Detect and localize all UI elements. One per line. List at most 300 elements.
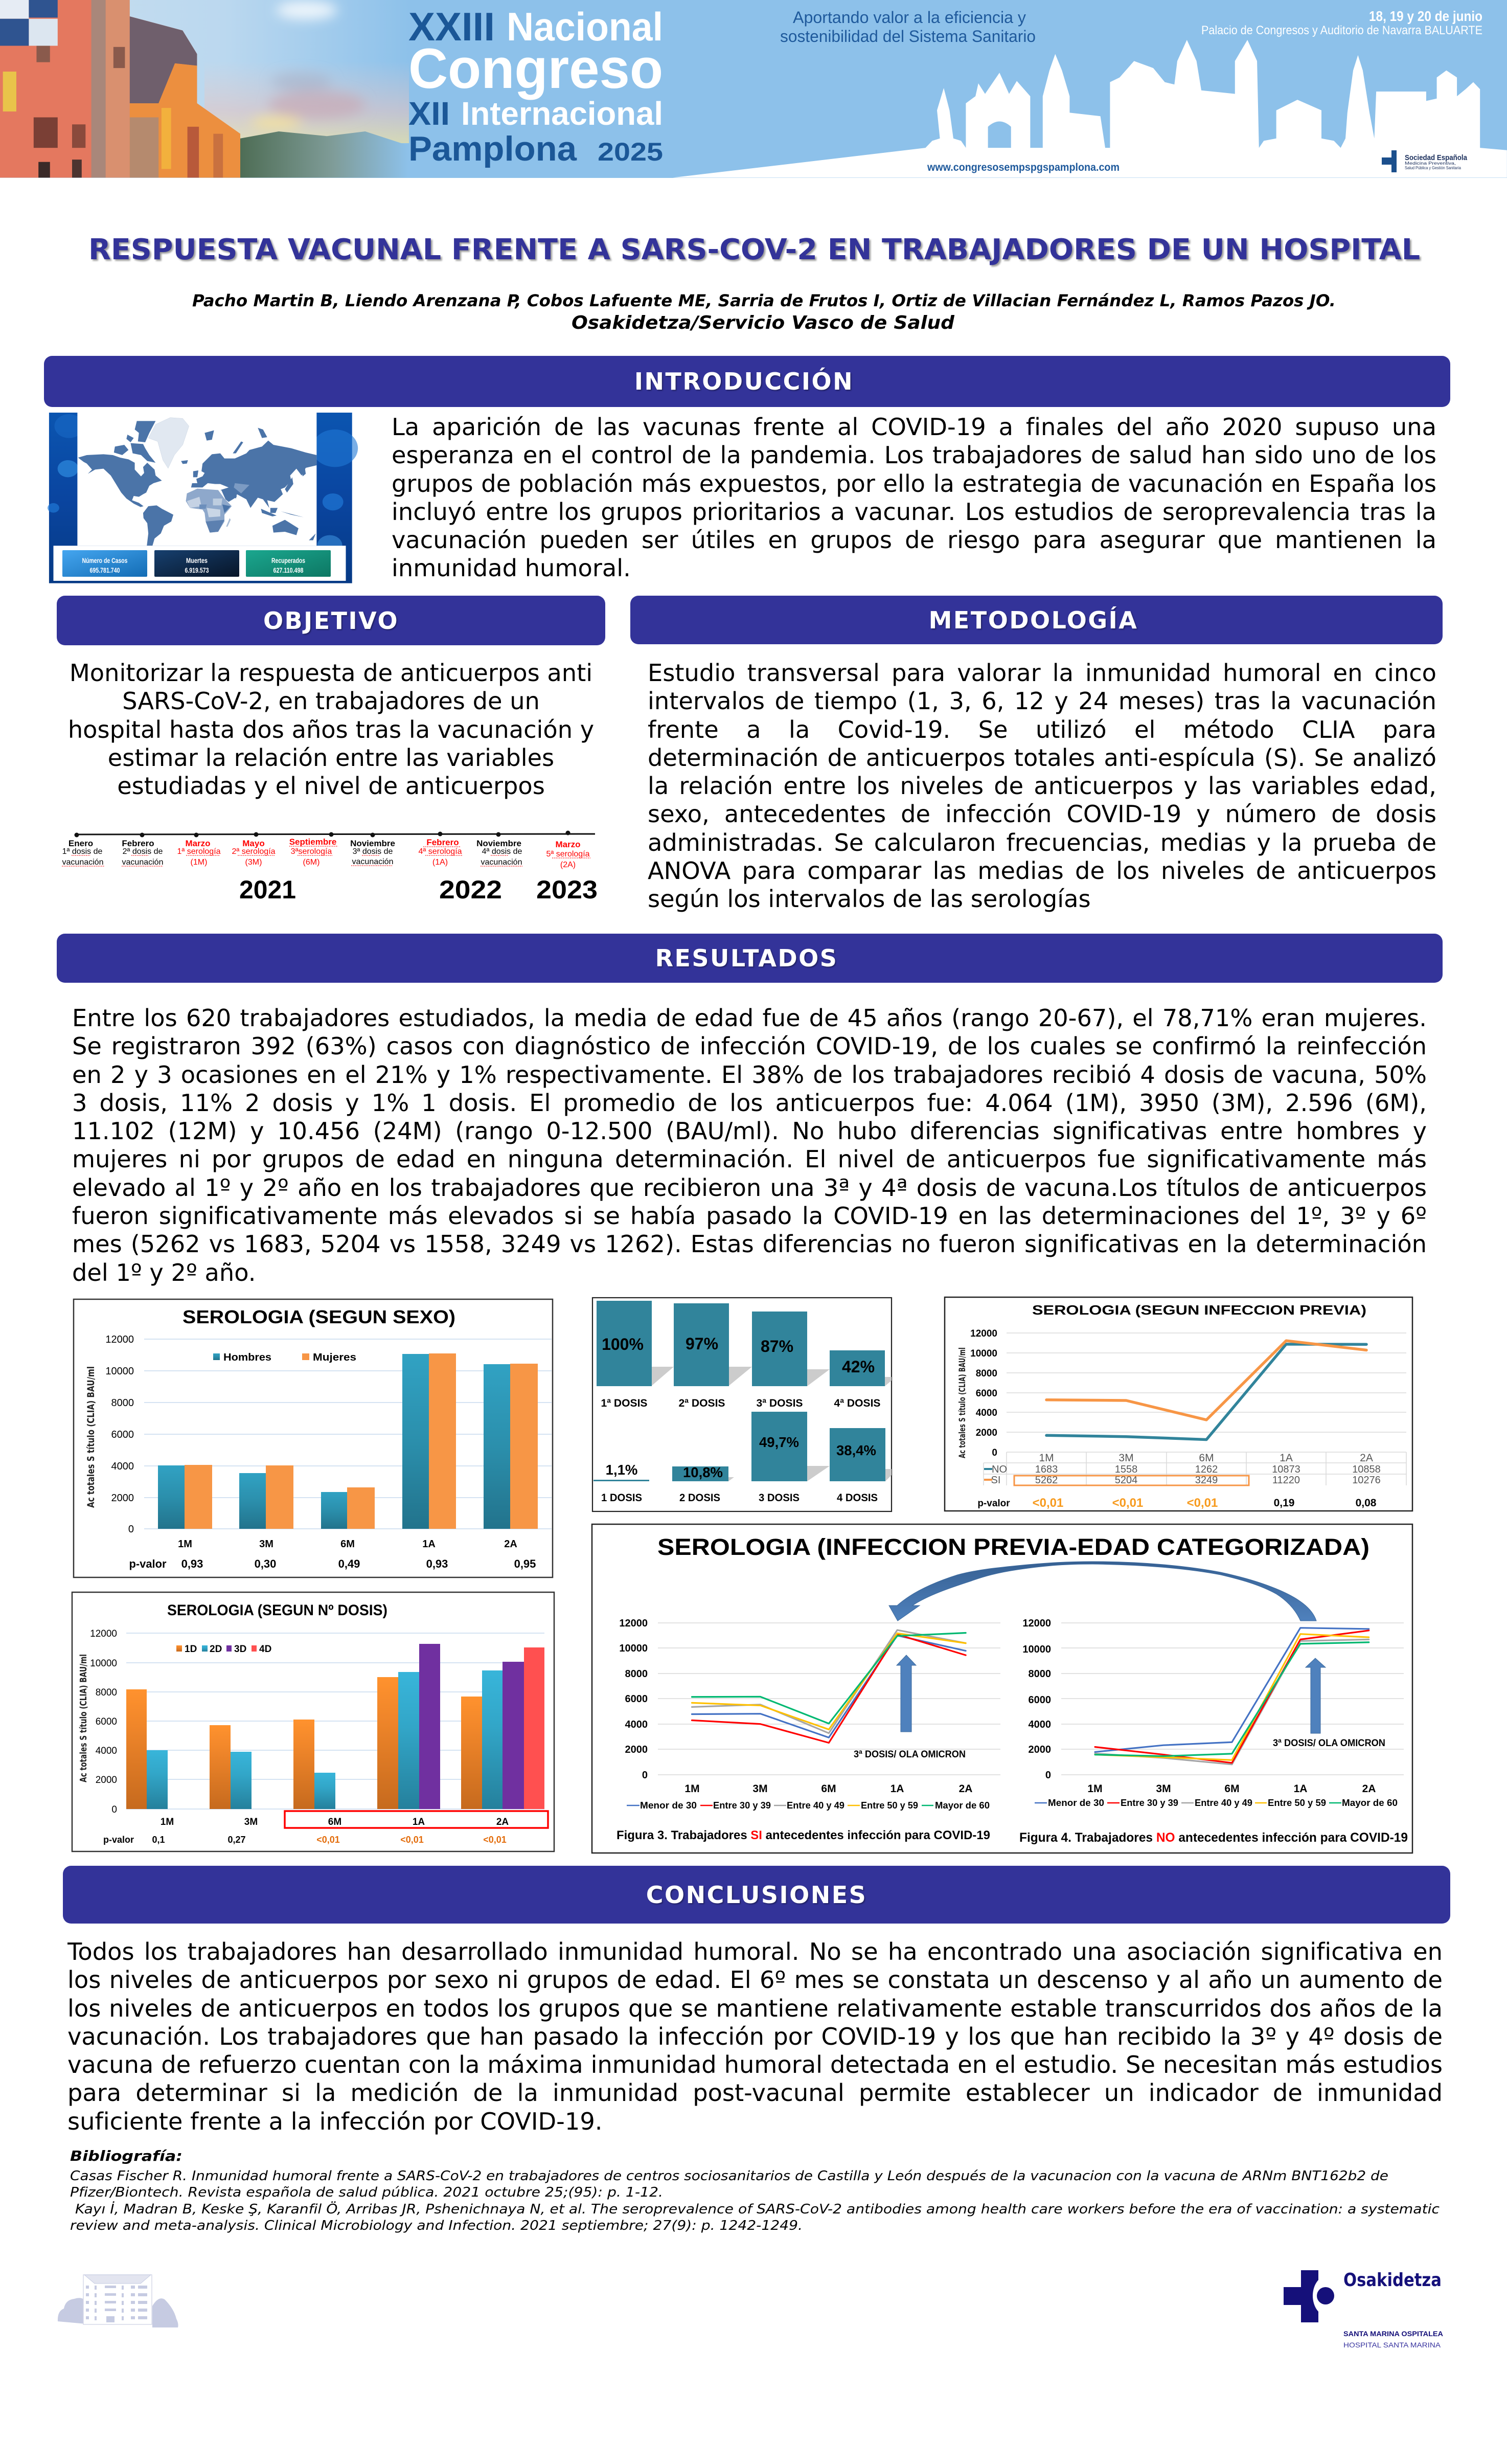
stat: Muertes: 6.919.573 xyxy=(185,566,209,574)
logo: Osakidetza: Osakidetza xyxy=(1343,2270,1442,2291)
p values: <0,01 xyxy=(1033,1496,1063,1510)
data table: 5204 xyxy=(1115,1475,1137,1486)
text: resultados: Entre los 620 trabajadores estudiados, la media de edad fue de 45 años (rango 20-67), el 78,71% eran mujeres. xyxy=(72,1004,1427,1032)
vaccination and serology timeline: 1ª serología xyxy=(177,847,221,856)
text: resultados: mujeres ni por grupos de edad en ninguna determinación. El nivel de anticuerpos fue significativamente más xyxy=(72,1145,1427,1173)
y axis: 10000 xyxy=(90,1658,117,1669)
y axis: 12000 xyxy=(105,1334,134,1345)
p values: <0,01 xyxy=(483,1835,507,1845)
percentages by total doses: 10,8% xyxy=(683,1464,723,1480)
legend: Hombres xyxy=(223,1352,271,1363)
stat: Recuperados: Recuperados xyxy=(271,556,305,564)
data table: 1558 xyxy=(1115,1464,1137,1475)
vaccination and serology timeline: (2A) xyxy=(560,861,576,869)
world map panel with case statistics xyxy=(48,413,358,583)
logo: Sociedad Española: Medicina Preventiva, xyxy=(1405,161,1456,166)
text: conclusiones: vacunación. Los trabajadores que han pasado la infección por COVID-19 y los que han recibido la 3º y 4º dosis de xyxy=(67,2023,1443,2050)
p values: 0,30 xyxy=(255,1557,276,1570)
labels by dose received: 3ª DOSIS xyxy=(757,1397,803,1409)
y axis: 12000 xyxy=(90,1629,117,1639)
vaccination and serology timeline: Marzo xyxy=(185,839,211,848)
y axis: 8000 xyxy=(111,1397,134,1409)
data table: 10873 xyxy=(1272,1464,1300,1475)
x axis labels xyxy=(161,1817,509,1827)
p values: 0,1 xyxy=(152,1835,165,1845)
vaccination and serology timeline: vacunación xyxy=(481,858,522,867)
congress motto: sostenibilidad del Sistema Sanitario xyxy=(780,27,1036,46)
p values: 0,27 xyxy=(227,1835,246,1845)
orange highlight box xyxy=(1014,1476,1249,1485)
timeline years: 2023 xyxy=(536,875,598,904)
labels by total doses: 4 DOSIS xyxy=(837,1492,878,1504)
vaccination and serology timeline: Mayo xyxy=(242,839,265,848)
y axis xyxy=(105,1334,134,1535)
congress name xyxy=(408,4,663,168)
text: introducción: La aparición de las vacunas frente al COVID-19 a finales del año 2020 supuso una xyxy=(392,413,1436,441)
bibliography: Bibliografía: xyxy=(70,2147,182,2164)
chart: figura 4 x axis: 1A xyxy=(1294,1783,1307,1795)
y axis: 2000 xyxy=(976,1428,997,1438)
chart: serología según número de dosis xyxy=(72,1592,554,1851)
text: metodología: frente a la Covid-19. Se utilizó el método CLIA para xyxy=(648,716,1436,743)
text: metodología xyxy=(648,659,1436,913)
chart: serología según infección previa xyxy=(945,1297,1412,1511)
data table: 2A xyxy=(1360,1452,1373,1464)
y axis: 10000 xyxy=(105,1366,134,1377)
y axis: 10000 xyxy=(970,1348,997,1359)
data table: 6M xyxy=(1199,1452,1214,1464)
chart: figura 4 y axis: 2000 xyxy=(1029,1744,1051,1755)
chart: figura 3 y axis: 10000 xyxy=(619,1643,648,1654)
text: objetivo xyxy=(68,659,594,800)
stat: Recuperados: 627.110.498 xyxy=(273,566,304,574)
vaccination and serology timeline: Marzo xyxy=(555,840,581,849)
p values xyxy=(977,1496,1377,1510)
caption figura 4: Figura 4. Trabajadores NO antecedentes infección para COVID-19 xyxy=(1019,1830,1408,1845)
chart: figura 3 y axis xyxy=(619,1618,648,1781)
bars by total doses xyxy=(593,1412,885,1481)
chart: figura 3 y axis: 4000 xyxy=(625,1719,648,1730)
line: con infección previa xyxy=(1046,1341,1366,1420)
percentages by total doses: 49,7% xyxy=(759,1434,799,1450)
labels by dose received: 2ª DOSIS xyxy=(679,1397,725,1409)
x axis labels: 1M xyxy=(178,1539,192,1550)
x axis labels: 1A xyxy=(413,1817,425,1827)
p values: <0,01 xyxy=(400,1835,424,1845)
chart: figura 3 y axis: 8000 xyxy=(625,1668,648,1680)
annotation figure 4: 3ª DOSIS/ OLA OMICRON xyxy=(1273,1738,1385,1749)
x axis labels: 2A xyxy=(504,1539,517,1550)
chart: figura 4 legend: Mayor de 60 xyxy=(1342,1798,1398,1808)
bibliography: Casas Fischer R. Inmunidad humoral frente a SARS-CoV-2 en trabajadores de centros sociosanitarios de Castilla y León después de la vacunacion con la vacuna de ARNm BNT162b2 de xyxy=(70,2168,1388,2184)
arrow: curved arrow linking both charts xyxy=(889,1562,1316,1621)
text: metodología: determinación de anticuerpos totales anti-espícula (S). Se analizó xyxy=(648,744,1436,772)
text: metodología: según los intervalos de las serologías xyxy=(648,885,1091,913)
bars 4D xyxy=(524,1647,544,1809)
text: objetivo: estimar la relación entre las variables xyxy=(108,744,554,772)
y axis title: Ac totales S título (CLIA) BAU/ml xyxy=(78,1654,89,1782)
title: RESPUESTA VACUNAL FRENTE A SARS-COV-2 EN TRABAJADORES DE UN HOSPITAL xyxy=(88,233,1420,266)
text: introducción: inmunidad humoral. xyxy=(392,554,631,582)
heading: resultados: RESULTADOS xyxy=(655,944,838,972)
chart: figura 4 legend: Entre 50 y 59 xyxy=(1268,1798,1326,1808)
chart: figura 3 x axis: 1M xyxy=(684,1783,700,1795)
x axis labels: 6M xyxy=(328,1817,341,1827)
chart panel: serología por infección previa y edad categorizada xyxy=(592,1524,1412,1853)
congress motto xyxy=(780,8,1036,46)
bibliography xyxy=(70,2147,1440,2233)
y axis: 2000 xyxy=(96,1775,117,1785)
y axis: 4000 xyxy=(96,1746,117,1756)
vaccination and serology timeline: Febrero xyxy=(426,838,459,847)
y axis title: Ac totales S título (CLIA) BAU/ml xyxy=(85,1366,97,1508)
text: resultados: elevado al 1º y 2º año en los trabajadores que recibieron una 3ª y 4ª dosis de vacuna.Los títulos de anticuerpos xyxy=(72,1174,1427,1202)
text: metodología: sexo, antecedentes de infección COVID-19 y número de dosis xyxy=(648,800,1436,828)
chart title: SEROLOGIA (SEGUN INFECCION PREVIA) xyxy=(1032,1302,1366,1318)
p values: 0,93 xyxy=(426,1557,448,1570)
bibliography: review and meta-analysis. Clinical Microbiology and Infection. 2021 septiembre; 27(9): p. 1242-1249. xyxy=(70,2218,803,2233)
vaccination and serology timeline: (3M) xyxy=(245,858,262,867)
chart: figura 4 x axis: 3M xyxy=(1156,1783,1171,1795)
text: metodología: administradas. Se calcularon frecuencias, medias y la prueba de xyxy=(648,829,1436,856)
p values: 0,93 xyxy=(181,1557,203,1570)
y axis: 4000 xyxy=(976,1408,997,1418)
skyline of Pamplona and white wedge xyxy=(673,40,1507,177)
text: objetivo: estudiadas y el nivel de anticuerpos xyxy=(117,772,545,800)
vaccination and serology timeline: 1ª dosis de xyxy=(62,847,103,856)
labels by dose received xyxy=(601,1397,880,1409)
chart: figura 3 y axis: 12000 xyxy=(619,1618,648,1629)
chart: figura 4 y axis xyxy=(1022,1618,1051,1781)
heading: conclusiones: CONCLUSIONES xyxy=(646,1881,867,1908)
chart: figura 3 x axis: 6M xyxy=(821,1783,836,1795)
vaccination and serology timeline: (6M) xyxy=(303,858,319,867)
text: resultados: Se registraron 392 (63%) casos con diagnóstico de infección COVID-19, de los cuales se confirmó la reinfección xyxy=(72,1032,1427,1060)
p values: 0,19 xyxy=(1274,1497,1294,1509)
congress name: XXIII xyxy=(408,4,495,49)
timeline years xyxy=(239,875,598,904)
x axis labels: 2A xyxy=(496,1817,509,1827)
chart: figura 3 legend: Mayor de 60 xyxy=(935,1800,990,1811)
text: conclusiones: Todos los trabajadores han desarrollado inmunidad humoral. No se ha encontrado una asociación significativa en xyxy=(67,1938,1443,1965)
vaccination and serology timeline: Enero xyxy=(68,839,93,848)
y axis: 8000 xyxy=(96,1687,117,1698)
x axis labels: 1A xyxy=(422,1539,436,1550)
chart: figura 3 legend xyxy=(627,1800,990,1811)
vaccination and serology timeline: vacunación xyxy=(62,858,103,867)
chart: figura 3 y axis: 0 xyxy=(642,1770,648,1781)
vaccination and serology timeline: 4ª serología xyxy=(418,847,462,856)
congress name: Congreso xyxy=(408,37,663,100)
data table: 1M xyxy=(1039,1452,1054,1464)
stat: Recuperados xyxy=(246,550,331,577)
data table: 10858 xyxy=(1352,1464,1381,1475)
chart: figura 4 legend: Entre 30 y 39 xyxy=(1121,1798,1178,1808)
logo: hospital building xyxy=(58,2275,178,2327)
heading: conclusiones xyxy=(63,1866,1450,1924)
percentages by dose received: 100% xyxy=(602,1335,644,1353)
logo: Osakidetza xyxy=(1284,2270,1443,2349)
y axis xyxy=(90,1629,117,1815)
text: resultados: en 2 y 3 ocasiones en el 21% y 1% respectivamente. El 38% de los trabajadores recibió 4 dosis de vacuna, 50% xyxy=(72,1061,1427,1089)
vaccination and serology timeline: 5ª serología xyxy=(546,850,590,858)
congress name: Nacional xyxy=(507,4,663,49)
text: conclusiones: para determinar si la medición de la inmunidad post-vacunal permite establecer un indicador de inmunidad xyxy=(67,2079,1443,2107)
caption figura 3: Figura 3. Trabajadores SI antecedentes infección para COVID-19 xyxy=(616,1828,990,1842)
congress name: Pamplona xyxy=(408,129,577,168)
data table xyxy=(984,1452,1381,1486)
chart: figura 3 legend: Entre 50 y 59 xyxy=(861,1800,918,1811)
legend: 1D xyxy=(185,1644,197,1655)
labels by total doses: 1 DOSIS xyxy=(601,1492,642,1504)
percentages by dose received xyxy=(602,1335,875,1376)
x axis labels: 3M xyxy=(259,1539,273,1550)
chart title: SEROLOGIA (SEGUN Nº DOSIS) xyxy=(167,1602,387,1619)
logo: Sociedad Española: Salud Pública y Gestión Sanitaria xyxy=(1405,166,1462,170)
annotation figure 3: 3ª DOSIS/ OLA OMICRON xyxy=(854,1749,966,1760)
congress date and venue: Palacio de Congresos y Auditorio de Navarra BALUARTE xyxy=(1201,24,1482,37)
text: metodología: la relación entre los niveles de anticuerpos y las variables edad, xyxy=(648,772,1436,800)
chart: figura 4 y axis: 8000 xyxy=(1029,1668,1051,1680)
legend xyxy=(176,1644,271,1655)
chart: figura 3 legend: Entre 40 y 49 xyxy=(787,1800,844,1811)
legend: 3D xyxy=(234,1644,246,1655)
chart: figura 4 legend: Menor de 30 xyxy=(1048,1798,1104,1808)
chart: figura 4 x axis: 6M xyxy=(1224,1783,1240,1795)
y axis: 0 xyxy=(111,1804,117,1815)
text: resultados: 11.102 (12M) y 10.456 (24M) (rango 0-12.500 (BAU/ml). No hubo diferencias significativas entre hombres y xyxy=(72,1117,1427,1145)
congress date and venue: 18, 19 y 20 de junio xyxy=(1369,8,1482,24)
bars 1D xyxy=(126,1677,482,1809)
vaccination and serology timeline: 3ª dosis de xyxy=(353,847,393,856)
text: resultados xyxy=(72,1004,1427,1286)
x axis labels xyxy=(178,1539,517,1550)
arrow: third dose figure 3 xyxy=(897,1655,916,1732)
vaccination and serology timeline: Septiembre xyxy=(289,837,336,847)
legend xyxy=(213,1352,356,1363)
percentages by dose received: 87% xyxy=(761,1337,793,1355)
p values: p-valor xyxy=(129,1557,167,1570)
p values: 0,95 xyxy=(514,1557,536,1570)
y axis xyxy=(970,1328,997,1458)
bars mujeres xyxy=(185,1353,538,1529)
vaccination and serology timeline: vacunación xyxy=(352,857,393,866)
heading: objetivo: OBJETIVO xyxy=(263,606,399,634)
vaccination and serology timeline: 4ª dosis de xyxy=(482,847,522,856)
p values xyxy=(129,1557,536,1570)
labels by dose received: 1ª DOSIS xyxy=(601,1397,647,1409)
panel: coverage of vaccine doses xyxy=(592,1298,892,1511)
legend: 2D xyxy=(210,1644,222,1655)
chart title: SEROLOGIA (SEGUN SEXO) xyxy=(182,1306,455,1327)
text: objetivo: Monitorizar la respuesta de anticuerpos anti xyxy=(70,659,592,687)
text: introducción: vacunación pueden ser útiles en grupos de riesgo para asegurar que mantienen la xyxy=(392,526,1436,554)
data table: 1A xyxy=(1280,1452,1293,1464)
chart: figura 4 x axis xyxy=(1087,1783,1376,1795)
chart: figura 3 legend: Entre 30 y 39 xyxy=(713,1800,771,1811)
data table: 11220 xyxy=(1272,1475,1300,1486)
vaccination and serology timeline: 2ª dosis de xyxy=(123,847,163,856)
y axis: 6000 xyxy=(976,1388,997,1399)
authors and institution xyxy=(192,291,1336,333)
text: resultados: 3 dosis, 11% 2 dosis y 1% 1 dosis. El promedio de los anticuerpos fue: 4.064 (1M), 3950 (3M), 2.596 (6M), xyxy=(72,1089,1427,1117)
data table: 3M xyxy=(1118,1452,1134,1464)
data table: 5262 xyxy=(1035,1475,1058,1486)
heading: introducción xyxy=(44,356,1450,407)
data table: NO xyxy=(992,1464,1007,1475)
logo: Sociedad Española: Sociedad Española xyxy=(1405,153,1468,162)
text: conclusiones: los niveles de anticuerpos por sexo ni grupos de edad. El 6º mes se constata un descenso y al año un aumento de xyxy=(67,1966,1443,1994)
chart: figura 3 x axis: 3M xyxy=(752,1783,768,1795)
banner photo: Pamplona street at sunset xyxy=(0,0,409,178)
p values: 0,49 xyxy=(338,1557,360,1570)
chart: figura 3 x axis xyxy=(684,1783,972,1795)
grid of both charts xyxy=(658,1623,1404,1775)
p values: <0,01 xyxy=(1112,1496,1143,1510)
timeline years: 2022 xyxy=(439,875,502,904)
p values: 0,08 xyxy=(1356,1497,1377,1509)
vaccination and serology timeline: (1M) xyxy=(191,858,207,867)
heading: metodología xyxy=(630,596,1443,644)
text: resultados: del 1º y 2º año. xyxy=(72,1259,256,1286)
percentages by dose received: 42% xyxy=(842,1358,875,1376)
congress name: 2025 xyxy=(598,138,663,166)
arrow: third dose figure 4 xyxy=(1306,1658,1326,1733)
y axis: 4000 xyxy=(111,1461,134,1472)
p values: <0,01 xyxy=(316,1835,340,1845)
chart: figura 4 y axis: 10000 xyxy=(1022,1644,1051,1655)
vaccination and serology timeline: Noviembre xyxy=(350,839,395,848)
chart: figura 4 legend xyxy=(1035,1798,1398,1808)
authors and institution: Osakidetza/Servicio Vasco de Salud xyxy=(572,312,955,333)
text: introducción: esperanza en el control de la pandemia. Los trabajadores de salud han sido uno de los xyxy=(392,441,1436,469)
text: conclusiones: suficiente frente a la infección por COVID-19. xyxy=(67,2108,603,2135)
text: introducción: incluyó entre los grupos prioritarios a vacunar. Los estudios de seroprevalencia tras la xyxy=(392,498,1436,526)
y axis: 12000 xyxy=(970,1328,997,1339)
legend: Mujeres xyxy=(313,1352,356,1363)
y axis: 2000 xyxy=(111,1493,134,1504)
text: metodología: ANOVA para comparar las medias de los niveles de anticuerpos xyxy=(648,857,1436,885)
percentages by dose received: 97% xyxy=(686,1335,718,1353)
p values: <0,01 xyxy=(1187,1496,1218,1510)
bibliography: Kayı İ, Madran B, Keske Ş, Karanfil Ö, Arribas JR, Pshenichnaya N, et al. The seroprevalence of SARS-CoV-2 antibodies among health care workers before the era of vaccination: a systematic xyxy=(75,2201,1440,2217)
y axis title: Ac totales S título (CLIA) BAU/ml xyxy=(957,1347,968,1458)
bibliography: Pfizer/Biontech. Revista española de salud pública. 2021 octubre 25;(95): p. 1-12. xyxy=(70,2185,663,2200)
chart: figura 4 y axis: 4000 xyxy=(1029,1719,1051,1730)
y axis: 0 xyxy=(992,1448,997,1458)
heading: introducción: INTRODUCCIÓN xyxy=(634,368,854,395)
text: resultados: fueron significativamente más elevados si se había pasado la COVID-19 en las determinaciones del 1º, 3º y 6º xyxy=(72,1202,1427,1230)
vaccination and serology timeline xyxy=(62,830,595,869)
vaccination and serology timeline: vacunación xyxy=(122,858,163,867)
data table: 10276 xyxy=(1352,1475,1381,1486)
timeline years: 2021 xyxy=(239,875,296,904)
bars 2D xyxy=(147,1670,503,1809)
chart: serología según sexo xyxy=(74,1299,553,1577)
legend: 4D xyxy=(259,1644,271,1655)
stat: Muertes: Muertes xyxy=(186,556,208,564)
chart title: SEROLOGIA (INFECCION PREVIA-EDAD CATEGORIZADA) xyxy=(657,1534,1369,1560)
banner: congress header xyxy=(0,0,1507,178)
vaccination and serology timeline: (1A) xyxy=(432,858,448,867)
line: sin infección previa xyxy=(1046,1344,1366,1440)
red highlight box xyxy=(285,1811,548,1828)
data table: 3249 xyxy=(1195,1475,1218,1486)
labels by dose received: 4ª DOSIS xyxy=(834,1397,880,1409)
stat: Muertes xyxy=(154,550,239,577)
chart: figura 3 y axis: 6000 xyxy=(625,1693,648,1705)
y axis: 8000 xyxy=(976,1368,997,1379)
congress name: XII xyxy=(408,95,450,132)
chart: figura 4 x axis: 2A xyxy=(1362,1783,1376,1795)
text: introducción: grupos de población más expuestos, por ello la estrategia de vacunación en España los xyxy=(392,470,1436,498)
chart: figura 4 lines xyxy=(1095,1628,1369,1765)
x axis labels: 1M xyxy=(161,1817,174,1827)
chart: figura 4 y axis: 12000 xyxy=(1022,1618,1051,1629)
text: metodología: intervalos de tiempo (1, 3, 6, 12 y 24 meses) tras la vacunación xyxy=(648,687,1436,715)
heading: resultados xyxy=(57,934,1443,983)
logo: Sociedad Española xyxy=(1382,150,1468,172)
bars hombres xyxy=(158,1354,510,1529)
chart: figura 3 y axis: 2000 xyxy=(625,1744,648,1755)
y axis: 6000 xyxy=(96,1716,117,1727)
data table: 1262 xyxy=(1195,1464,1218,1475)
chart: figura 3 x axis: 1A xyxy=(890,1783,904,1795)
vaccination and serology timeline: 2ª serología xyxy=(232,847,276,856)
vaccination and serology timeline: Febrero xyxy=(122,839,154,848)
chart: figura 3 lines xyxy=(692,1630,966,1743)
authors and institution: Pacho Martin B, Liendo Arenzana P, Cobos Lafuente ME, Sarria de Frutos I, Ortiz de Villacian Fernández L, Ramos Pazos JO. xyxy=(192,291,1336,310)
y axis: 6000 xyxy=(111,1429,134,1440)
x axis labels: 6M xyxy=(340,1539,355,1550)
text: metodología: Estudio transversal para valorar la inmunidad humoral en cinco xyxy=(648,659,1436,687)
symbol xyxy=(1284,2270,1343,2322)
data table: 1683 xyxy=(1035,1464,1058,1475)
text: objetivo: SARS-CoV-2, en trabajadores de un xyxy=(122,687,540,715)
vaccination and serology timeline: Noviembre xyxy=(476,839,521,848)
text: conclusiones: los niveles de anticuerpos en todos los grupos que se mantiene relativamente estable transcurridos dos años de la xyxy=(67,1995,1443,2022)
stat: Número de Casos: Número de Casos xyxy=(82,556,128,564)
congress motto: Aportando valor a la eficiencia y xyxy=(793,8,1026,27)
chart: figura 4 y axis: 0 xyxy=(1045,1770,1051,1781)
stat: Número de Casos: 695.781.740 xyxy=(90,566,120,574)
chart: figura 3 legend: Menor de 30 xyxy=(640,1800,697,1811)
heading: metodología: METODOLOGÍA xyxy=(929,606,1138,634)
congress name: Internacional xyxy=(461,95,663,132)
stat: Número de Casos xyxy=(62,550,147,577)
chart: figura 3 x axis: 2A xyxy=(959,1783,972,1795)
congress website: www.congresosempspgspamplona.com xyxy=(927,162,1120,173)
logo: Osakidetza: HOSPITAL SANTA MARINA xyxy=(1343,2341,1441,2349)
p values: p-valor xyxy=(977,1498,1010,1509)
logo: Osakidetza: SANTA MARINA OSPITALEA xyxy=(1343,2330,1443,2338)
bars 3D xyxy=(419,1644,524,1809)
p values: p-valor xyxy=(103,1835,134,1845)
chart: figura 4 x axis: 1M xyxy=(1087,1783,1103,1795)
percentages by total doses: 1,1% xyxy=(606,1462,637,1478)
x axis labels: 3M xyxy=(244,1817,258,1827)
labels by total doses xyxy=(601,1492,878,1504)
data table: SI xyxy=(991,1475,1000,1486)
chart: figura 4 legend: Entre 40 y 49 xyxy=(1195,1798,1252,1808)
percentages by total doses: 38,4% xyxy=(836,1442,876,1458)
bars by dose received xyxy=(597,1301,885,1386)
text: introducción xyxy=(392,413,1436,582)
text: objetivo: hospital hasta dos años tras la vacunación y xyxy=(68,716,594,743)
p values xyxy=(103,1835,507,1845)
text: conclusiones: vacuna de refuerzo cuentan con la máxima inmunidad humoral detectada en el estudio. Se necesitan más estudios xyxy=(67,2051,1443,2078)
vaccination and serology timeline: 3ªserología xyxy=(291,847,332,856)
